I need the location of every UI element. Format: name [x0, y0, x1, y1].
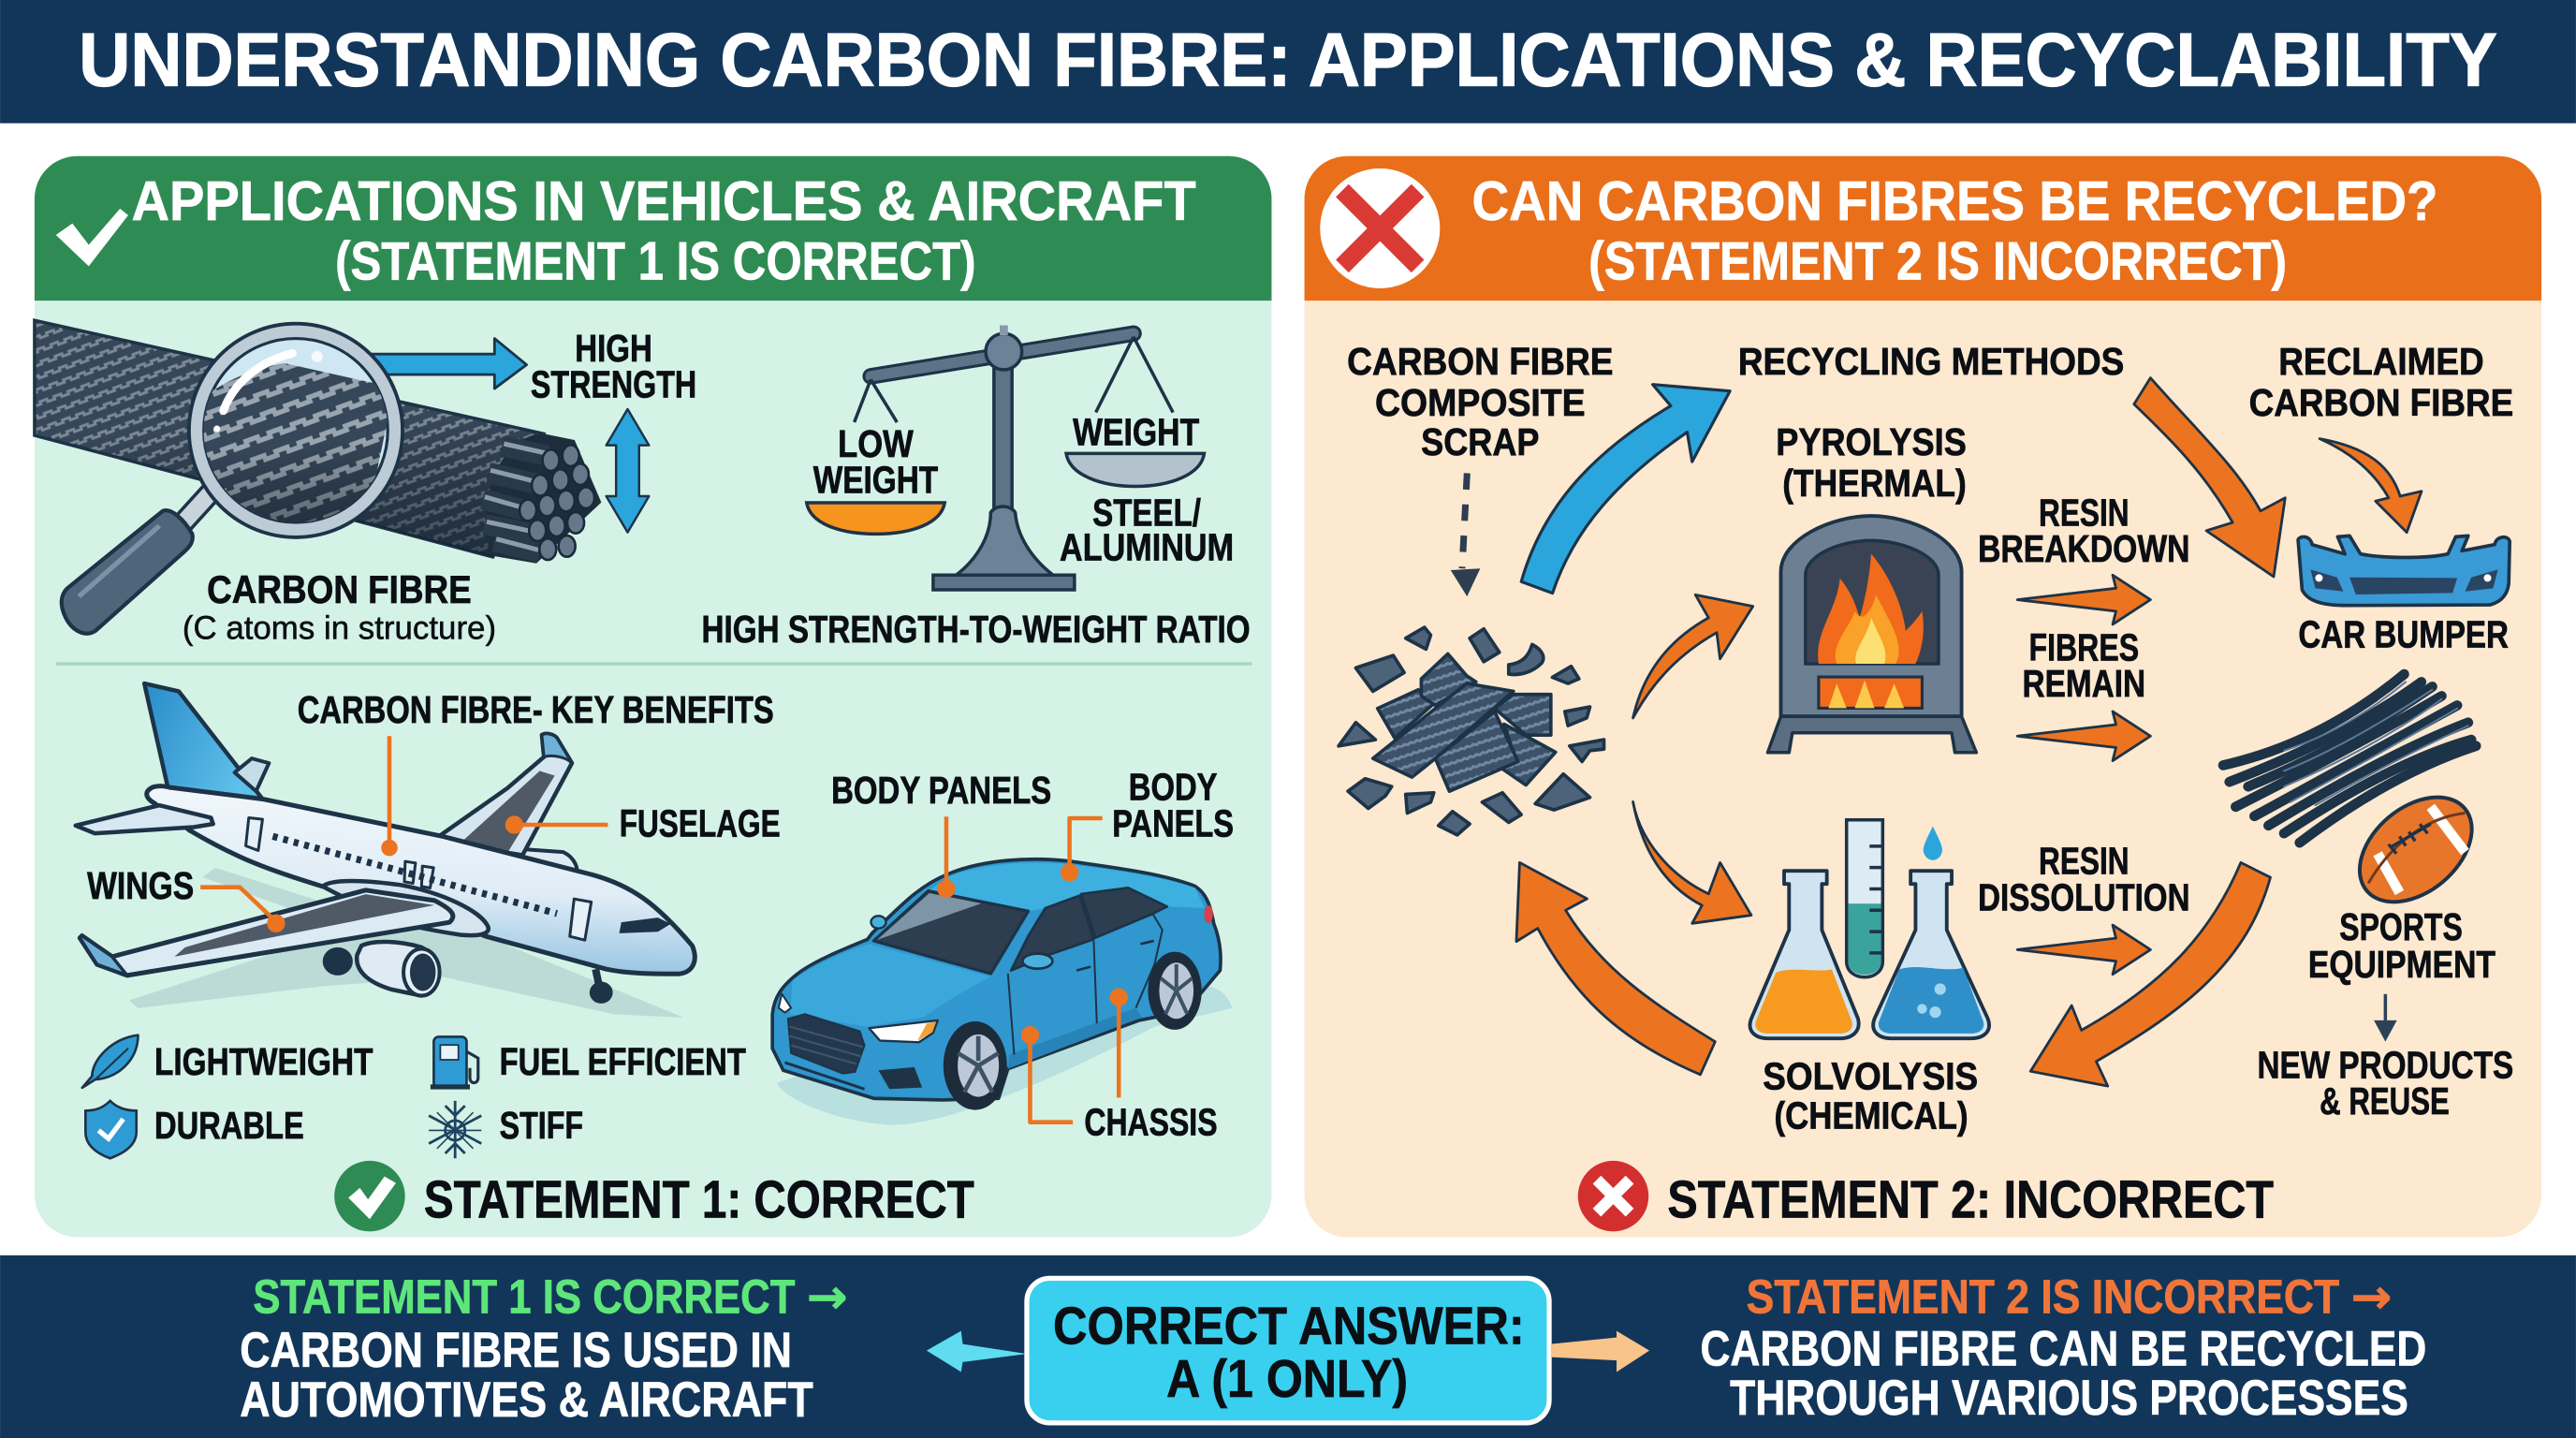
labels: reclaimed carbon fibre: CARBON FIBRE: [2249, 381, 2513, 424]
panel: can carbon fibres be recycled: [1305, 156, 2541, 1238]
labels: scale: ALUMINUM: [1060, 525, 1234, 568]
panel header: applications: APPLICATIONS IN VEHICLES & AIRCRAFT: [131, 169, 1196, 232]
label: high strength to weight ratio: HIGH STRENGTH-TO-WEIGHT RATIO: [701, 608, 1251, 651]
labels: solvolysis: [1763, 1055, 1978, 1137]
verdict: statement 1 correct: STATEMENT 1: CORRECT: [424, 1169, 974, 1228]
label: key benefits: CARBON FIBRE- KEY BENEFITS: [298, 688, 774, 731]
icon: airplane: [76, 683, 695, 1018]
labels: scale: [813, 411, 1234, 568]
test tube: [1847, 820, 1882, 977]
footer text: statement 1: AUTOMOTIVES & AIRCRAFT: [240, 1372, 813, 1428]
icon: football: [2339, 776, 2492, 923]
arrow: to new products: [2374, 994, 2397, 1042]
fuselage: [147, 786, 695, 974]
label: stiff: STIFF: [500, 1104, 583, 1147]
labels: reclaimed carbon fibre: RECLAIMED: [2278, 340, 2484, 383]
panel header: applications: (STATEMENT 1 IS CORRECT): [335, 231, 976, 291]
label: wings: WINGS: [87, 864, 194, 907]
label: durable: DURABLE: [154, 1104, 304, 1147]
arrow: to bumper: [2320, 439, 2422, 533]
callout: correct answer: [1027, 1278, 1549, 1423]
label: recycling methods: RECYCLING METHODS: [1738, 340, 2124, 383]
labels: scale: WEIGHT: [1073, 411, 1200, 454]
footer text: statement 2: →: [2351, 1269, 2392, 1325]
labels: sports equipment: [2308, 905, 2496, 986]
grille: [788, 1014, 864, 1074]
drop: [1924, 827, 1942, 860]
icon: solvolysis flasks: [1750, 820, 1989, 1038]
main gear: [323, 947, 353, 976]
headlights: [869, 1020, 938, 1042]
mirrors: [1022, 954, 1052, 969]
side windows: [1011, 896, 1093, 971]
nose gear: [595, 969, 600, 990]
labels: car parts: BODY: [1129, 766, 1218, 809]
arrow: lower right large: [2030, 862, 2271, 1086]
left pan: [807, 503, 944, 534]
label: high strength: STRENGTH: [531, 363, 696, 406]
lower body band: [1008, 1008, 1142, 1069]
labels: new products: [2257, 1043, 2513, 1123]
label: car bumper: CAR BUMPER: [2298, 612, 2509, 655]
icon: reclaimed fibre bundle: [2223, 674, 2476, 843]
title banner: [0, 0, 2576, 124]
arrow: left from answer: [927, 1331, 1027, 1372]
footer text: statement 1: →: [807, 1269, 848, 1325]
arrow: dashed scrap arrow: [1451, 473, 1480, 596]
leaders: car callouts: [937, 816, 1128, 1123]
windshield: [873, 891, 1028, 974]
labels: scale: LOW: [838, 422, 915, 465]
icon: snowflake: [429, 1101, 481, 1158]
footer text: statement 2: CARBON FIBRE CAN BE RECYCLED: [1701, 1321, 2426, 1376]
footer band: [0, 1255, 2576, 1438]
icon: fuel pump: [431, 1036, 478, 1090]
label: high strength: HIGH: [575, 327, 652, 370]
tail fin: [144, 683, 262, 799]
labels: solvolysis: (CHEMICAL): [1774, 1094, 1969, 1137]
stabiliser: [76, 805, 213, 833]
arrow: to furnace: [1633, 594, 1753, 718]
fibre rods: [483, 433, 601, 564]
far wing: [439, 734, 572, 855]
labels: pyrolysis: [1776, 420, 1967, 505]
labels: scrap: CARBON FIBRE: [1347, 340, 1613, 383]
arrow: blue strength arrow: [370, 339, 527, 389]
arrow: resin dissolution: [2017, 925, 2150, 975]
arrow: lower left large: [1516, 862, 1715, 1075]
callout: correct answer: CORRECT ANSWER:: [1053, 1297, 1525, 1356]
labels: car parts: BODY PANELS: [831, 769, 1051, 812]
callout: correct answer: A (1 ONLY): [1166, 1349, 1408, 1408]
label: C atoms: (C atoms in structure): [183, 610, 496, 647]
arrow: resin breakdown: [2017, 575, 2150, 624]
door lines: [1008, 915, 1163, 1055]
panel header: recycled: [1305, 156, 2541, 301]
label: carbon fibre: CARBON FIBRE: [207, 568, 472, 611]
arrow: to flasks: [1633, 801, 1751, 923]
label: high strength: [531, 327, 696, 406]
labels: scrap: [1347, 340, 1613, 463]
labels: fibres remain: FIBRES: [2029, 626, 2139, 669]
front wheel: [944, 1021, 1007, 1110]
labels: fibres remain: REMAIN: [2022, 662, 2145, 705]
intake: [878, 1067, 922, 1089]
labels: car parts: [831, 766, 1234, 1144]
engine: [357, 942, 438, 996]
icon: balance scale: [807, 325, 1204, 590]
labels: scrap: SCRAP: [1421, 420, 1540, 463]
labels: fibres remain: [2022, 626, 2145, 705]
arrow: blue curved: [1521, 385, 1730, 594]
labels: scale: STEEL/: [1092, 492, 1201, 535]
panel header: applications: [35, 156, 1271, 301]
near wing: [80, 890, 453, 976]
verdict: statement 1 correct: [334, 1161, 974, 1231]
labels: resin dissolution: DISSOLUTION: [1978, 875, 2190, 918]
leaders: airplane callouts: [200, 736, 607, 932]
labels: pyrolysis: (THERMAL): [1782, 462, 1967, 505]
labels: car parts: CHASSIS: [1084, 1101, 1218, 1144]
labels: resin breakdown: [1978, 492, 2190, 570]
icon: carbon scrap pile: [1339, 627, 1603, 835]
labels: resin breakdown: BREAKDOWN: [1978, 527, 2190, 570]
right pan: [1066, 453, 1204, 486]
labels: scale: WEIGHT: [813, 459, 938, 502]
arrow: fibres remain: [2017, 712, 2150, 761]
right flask: [1873, 871, 1989, 1038]
title banner: UNDERSTANDING CARBON FIBRE: APPLICATIONS & RECYCLABILITY: [79, 18, 2497, 102]
verdict: statement 2 incorrect: [1578, 1161, 2274, 1231]
panel header: recycled: (STATEMENT 2 IS INCORRECT): [1588, 231, 2287, 291]
label: fuel efficient: FUEL EFFICIENT: [500, 1040, 746, 1083]
panel header: recycled: CAN CARBON FIBRES BE RECYCLED?: [1472, 169, 2438, 232]
footer text: statement 2: THROUGH VARIOUS PROCESSES: [1730, 1371, 2408, 1426]
footer text: statement 2: [1701, 1269, 2426, 1426]
rear wheel: [1148, 952, 1202, 1030]
footer text: statement 1: CARBON FIBRE IS USED IN: [240, 1323, 792, 1378]
icon: feather: [82, 1035, 138, 1088]
footer text: statement 1: STATEMENT 1 IS CORRECT: [253, 1269, 795, 1323]
labels: new products: NEW PRODUCTS: [2257, 1043, 2513, 1086]
wing fairing: [323, 881, 489, 935]
left flask: [1750, 871, 1859, 1038]
verdict: statement 2 incorrect: STATEMENT 2: INCORRECT: [1667, 1169, 2274, 1228]
panel: applications in vehicles and aircraft: [35, 156, 1271, 1238]
arrow: right from answer: [1551, 1331, 1649, 1372]
label: fuselage: FUSELAGE: [620, 801, 781, 844]
labels: resin dissolution: [1978, 840, 2190, 918]
arrow: orange to reclaimed: [2134, 378, 2285, 577]
cockpit: [620, 917, 671, 933]
labels: new products: & REUSE: [2320, 1079, 2450, 1123]
far engine: [512, 849, 577, 873]
footer text: statement 1: [240, 1269, 848, 1428]
labels: reclaimed carbon fibre: [2249, 340, 2513, 424]
flame: [1818, 553, 1924, 664]
labels: sports equipment: SPORTS: [2339, 905, 2463, 948]
icon: carbon fibre tube under magnifier: [35, 320, 649, 634]
labels: pyrolysis: PYROLYSIS: [1776, 420, 1967, 463]
tail light: [1204, 905, 1213, 923]
icon: pyrolysis furnace: [1767, 516, 1976, 753]
labels: solvolysis: SOLVOLYSIS: [1763, 1055, 1978, 1098]
icon: magnifier: [62, 324, 402, 634]
label: lightweight: LIGHTWEIGHT: [154, 1040, 373, 1083]
doors: [246, 817, 592, 940]
windows row: [272, 836, 557, 914]
icon: shield: [85, 1101, 137, 1158]
labels: resin breakdown: RESIN: [2039, 492, 2130, 535]
labels: sports equipment: EQUIPMENT: [2308, 943, 2496, 986]
icon: blue car: [772, 859, 1233, 1125]
roof highlight: [929, 863, 1205, 911]
labels: scrap: COMPOSITE: [1375, 381, 1586, 424]
labels: resin dissolution: RESIN: [2039, 840, 2130, 883]
icon: car bumper: [2298, 536, 2510, 606]
footer text: statement 2: STATEMENT 2 IS INCORRECT: [1747, 1269, 2339, 1323]
body: [772, 859, 1221, 1100]
arrow: vertical double arrow: [607, 409, 649, 533]
labels: car parts: PANELS: [1112, 801, 1234, 844]
